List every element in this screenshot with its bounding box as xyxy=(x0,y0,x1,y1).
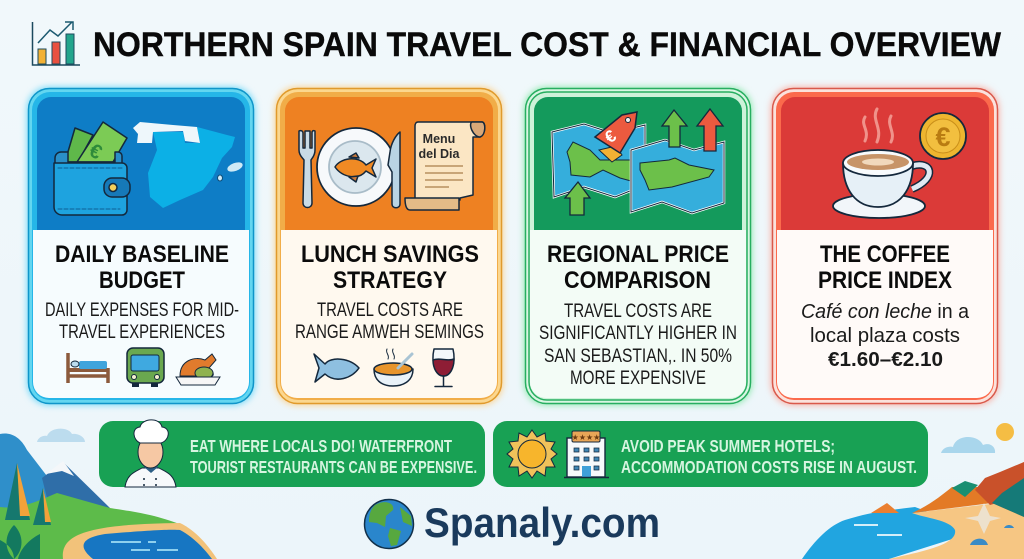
banner text: AVOID PEAK SUMMER HOTELS; xyxy=(621,436,835,456)
icon: fish xyxy=(314,354,359,382)
heading: COMPARISON xyxy=(564,267,711,294)
banner text: EAT WHERE LOCALS DO! WATERFRONT xyxy=(190,436,452,456)
icon: euro coin: € xyxy=(935,122,951,152)
icon: menu del dia scroll: Menu xyxy=(423,132,455,146)
icon: bed xyxy=(68,353,108,383)
description: RANGE AMWEH SEMINGS xyxy=(295,322,484,343)
icon: wallet with euro notes: € xyxy=(85,140,105,164)
description xyxy=(45,300,239,343)
tip banner: eat where locals do xyxy=(99,420,485,487)
icon: two folded maps with price tag and arrows xyxy=(552,109,724,215)
icon: sun xyxy=(507,430,557,478)
heading: STRATEGY xyxy=(333,267,447,294)
banner text xyxy=(190,436,477,477)
description: €1.60–€2.10 xyxy=(828,348,943,371)
icon: two folded maps with price tag and arrows: € xyxy=(601,126,620,147)
description: TRAVEL EXPERIENCES xyxy=(59,322,225,343)
icon: fork xyxy=(299,131,315,208)
icon: roast chicken xyxy=(176,354,220,385)
icon: menu del dia scroll xyxy=(405,122,485,210)
icon: bus xyxy=(127,348,164,387)
icon: steaming coffee cup xyxy=(833,109,929,218)
icon: menu del dia scroll: del Dia xyxy=(418,147,461,161)
banner text: TOURIST RESTAURANTS CAN BE EXPENSIVE. xyxy=(190,457,477,477)
title icon: rising bar chart xyxy=(32,22,80,65)
description: Café con leche in a xyxy=(801,300,970,323)
panel: lunch savings strategy xyxy=(275,87,503,405)
tip banner: avoid peak summer hotels xyxy=(493,421,928,487)
logo: globe and Spanaly.com xyxy=(364,499,660,548)
icon: knife xyxy=(388,132,400,208)
description xyxy=(801,300,970,371)
heading: THE COFFEE xyxy=(820,241,950,268)
heading: BUDGET xyxy=(99,267,185,294)
panel: regional price comparison xyxy=(524,87,752,405)
heading xyxy=(547,241,729,294)
heading: PRICE INDEX xyxy=(818,267,953,294)
description: TRAVEL COSTS ARE xyxy=(564,301,712,322)
heading xyxy=(301,241,479,294)
description: SIGNIFICANTLY HIGHER IN xyxy=(539,323,737,344)
banner text xyxy=(621,436,917,477)
panel: the coffee price index xyxy=(771,87,999,405)
heading xyxy=(55,241,229,294)
description: MORE EXPENSIVE xyxy=(570,368,706,389)
left coastal landscape xyxy=(0,429,217,559)
icon: chef xyxy=(125,420,176,487)
icon: soup bowl xyxy=(374,349,413,386)
icon: four star hotel: ★★★★ xyxy=(572,433,600,442)
icon: wine glass xyxy=(433,349,454,386)
heading xyxy=(818,241,953,294)
panel: daily baseline budget xyxy=(27,87,255,405)
description: TRAVEL COSTS ARE xyxy=(317,300,463,321)
heading: REGIONAL PRICE xyxy=(547,241,729,268)
description xyxy=(295,300,484,343)
description: local plaza costs xyxy=(810,324,960,347)
right coastal landscape xyxy=(802,423,1024,559)
banner text: ACCOMMODATION COSTS RISE IN AUGUST. xyxy=(621,457,917,477)
description xyxy=(539,301,737,389)
icon: plate with fish xyxy=(317,128,395,206)
icon: map of Spain xyxy=(133,122,244,208)
heading: DAILY BASELINE xyxy=(55,241,229,268)
icon: four star hotel xyxy=(564,431,609,478)
icon: wallet with euro notes xyxy=(54,122,130,215)
icon: globe xyxy=(364,500,414,548)
heading: LUNCH SAVINGS xyxy=(301,241,479,268)
description: SAN SEBASTIAN,. IN 50% xyxy=(544,346,732,367)
description: DAILY EXPENSES FOR MID- xyxy=(45,300,239,321)
logo text: Spanaly.com xyxy=(424,499,660,546)
icon: euro coin xyxy=(920,113,966,159)
